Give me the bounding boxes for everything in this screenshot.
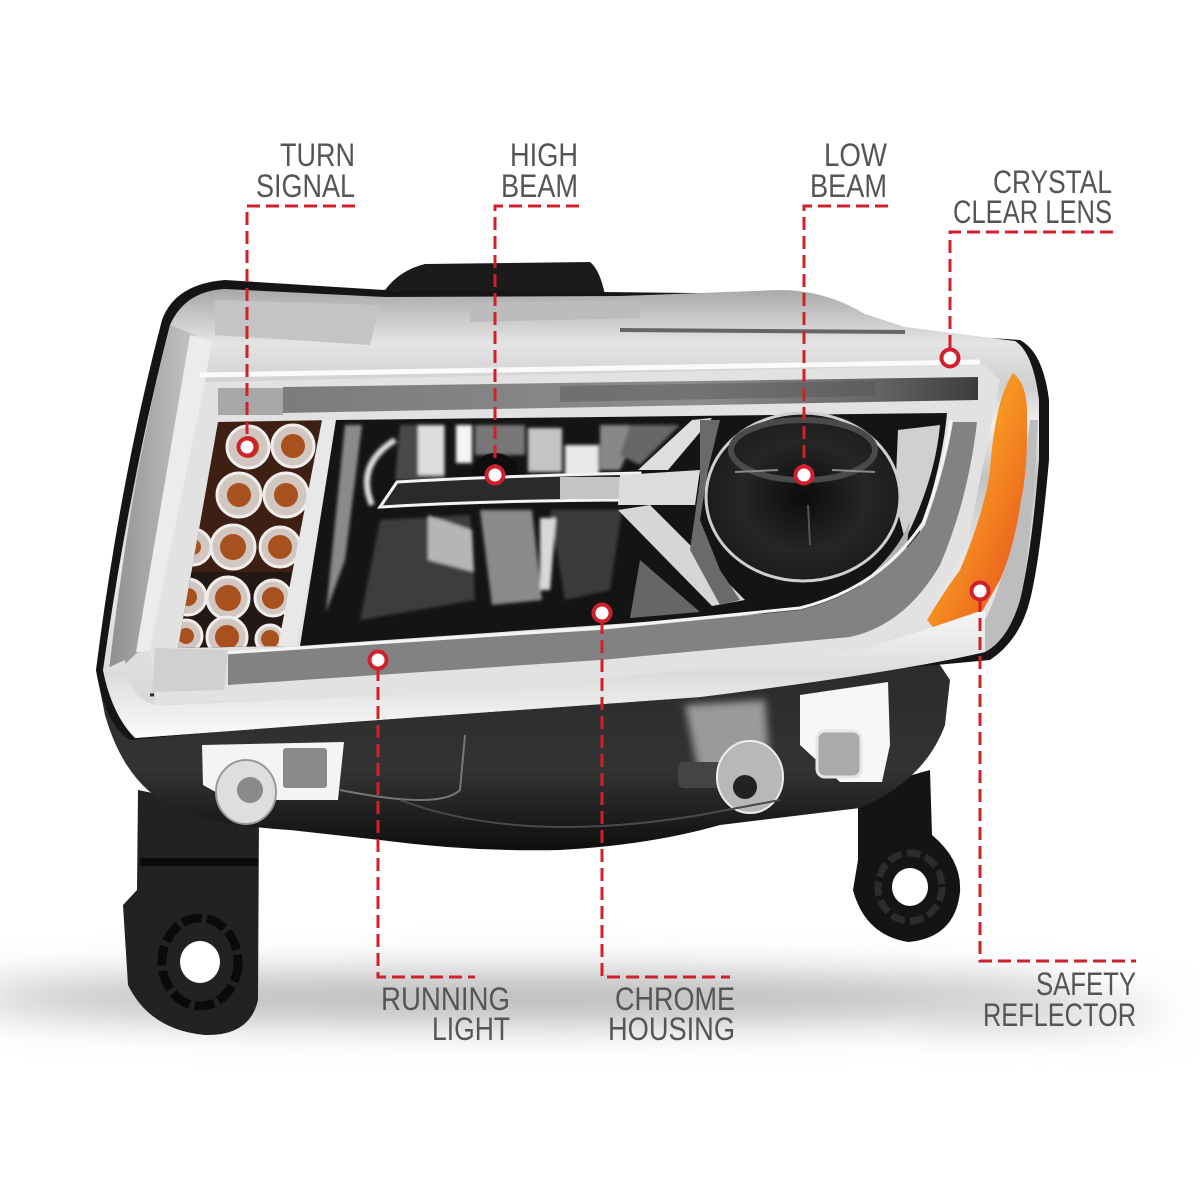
reflector highlights bbox=[326, 425, 680, 620]
callout: running light: LIGHT bbox=[432, 1011, 510, 1047]
callout: safety reflector: REFLECTOR bbox=[983, 997, 1136, 1033]
right clear adjuster knob bbox=[678, 741, 783, 813]
callout: high beam bbox=[486, 137, 579, 484]
right lens corner bbox=[985, 420, 1038, 652]
left mounting bracket bbox=[123, 790, 259, 1035]
callout: safety reflector: SAFETY bbox=[1036, 966, 1136, 1002]
left clear adjuster knob bbox=[216, 760, 276, 824]
callout: running light: RUNNING bbox=[381, 981, 510, 1017]
callout: chrome housing bbox=[594, 604, 735, 1047]
callout: low beam bbox=[796, 137, 888, 484]
callout: turn signal: SIGNAL bbox=[256, 168, 355, 204]
left square window bbox=[283, 748, 327, 788]
callout: low beam: LOW bbox=[824, 137, 888, 173]
callout: high beam: HIGH bbox=[510, 137, 578, 173]
upper running light tube bbox=[283, 377, 978, 413]
callout: crystal clear lens: CLEAR LENS bbox=[953, 194, 1112, 230]
chrome frame bbox=[150, 365, 1000, 705]
lower running light tube bbox=[228, 422, 977, 685]
right mounting bracket bbox=[853, 770, 960, 942]
chrome divider pillar bbox=[278, 420, 340, 646]
halogen bulb bbox=[471, 453, 519, 501]
left adjuster tab bbox=[202, 742, 344, 800]
black outer rim bbox=[96, 280, 1049, 740]
callout: chrome housing: HOUSING bbox=[608, 1011, 735, 1047]
projector lens bbox=[706, 413, 900, 581]
callout: low beam: BEAM bbox=[810, 168, 887, 204]
callout: turn signal bbox=[238, 137, 355, 456]
callout: safety reflector bbox=[972, 582, 1136, 1033]
lower black housing bbox=[96, 650, 950, 850]
chrome cross bar bbox=[380, 470, 700, 507]
callout: crystal clear lens bbox=[942, 164, 1113, 366]
clear lens body bbox=[103, 289, 1039, 738]
reflector bay bbox=[300, 413, 947, 646]
upper corner block bbox=[218, 388, 283, 415]
right adjuster tab bbox=[800, 682, 890, 782]
LED turn signal array bbox=[178, 420, 322, 648]
chrome lower strut bbox=[618, 505, 745, 606]
callout: turn signal: TURN bbox=[280, 137, 355, 173]
top connector bbox=[385, 262, 605, 295]
callout: high beam: BEAM bbox=[501, 168, 578, 204]
callout: running light bbox=[370, 652, 510, 1047]
chrome upper strut bbox=[638, 418, 712, 470]
headlight assembly bbox=[96, 262, 1049, 1035]
right square window bbox=[817, 731, 861, 777]
amber side marker bbox=[927, 373, 1027, 627]
callout: crystal clear lens: CRYSTAL bbox=[993, 164, 1112, 200]
infographic canvas bbox=[0, 143, 1158, 1046]
lower corner block bbox=[152, 648, 228, 692]
callout: chrome housing: CHROME bbox=[615, 981, 735, 1017]
floor shadow bbox=[0, 974, 1170, 1026]
